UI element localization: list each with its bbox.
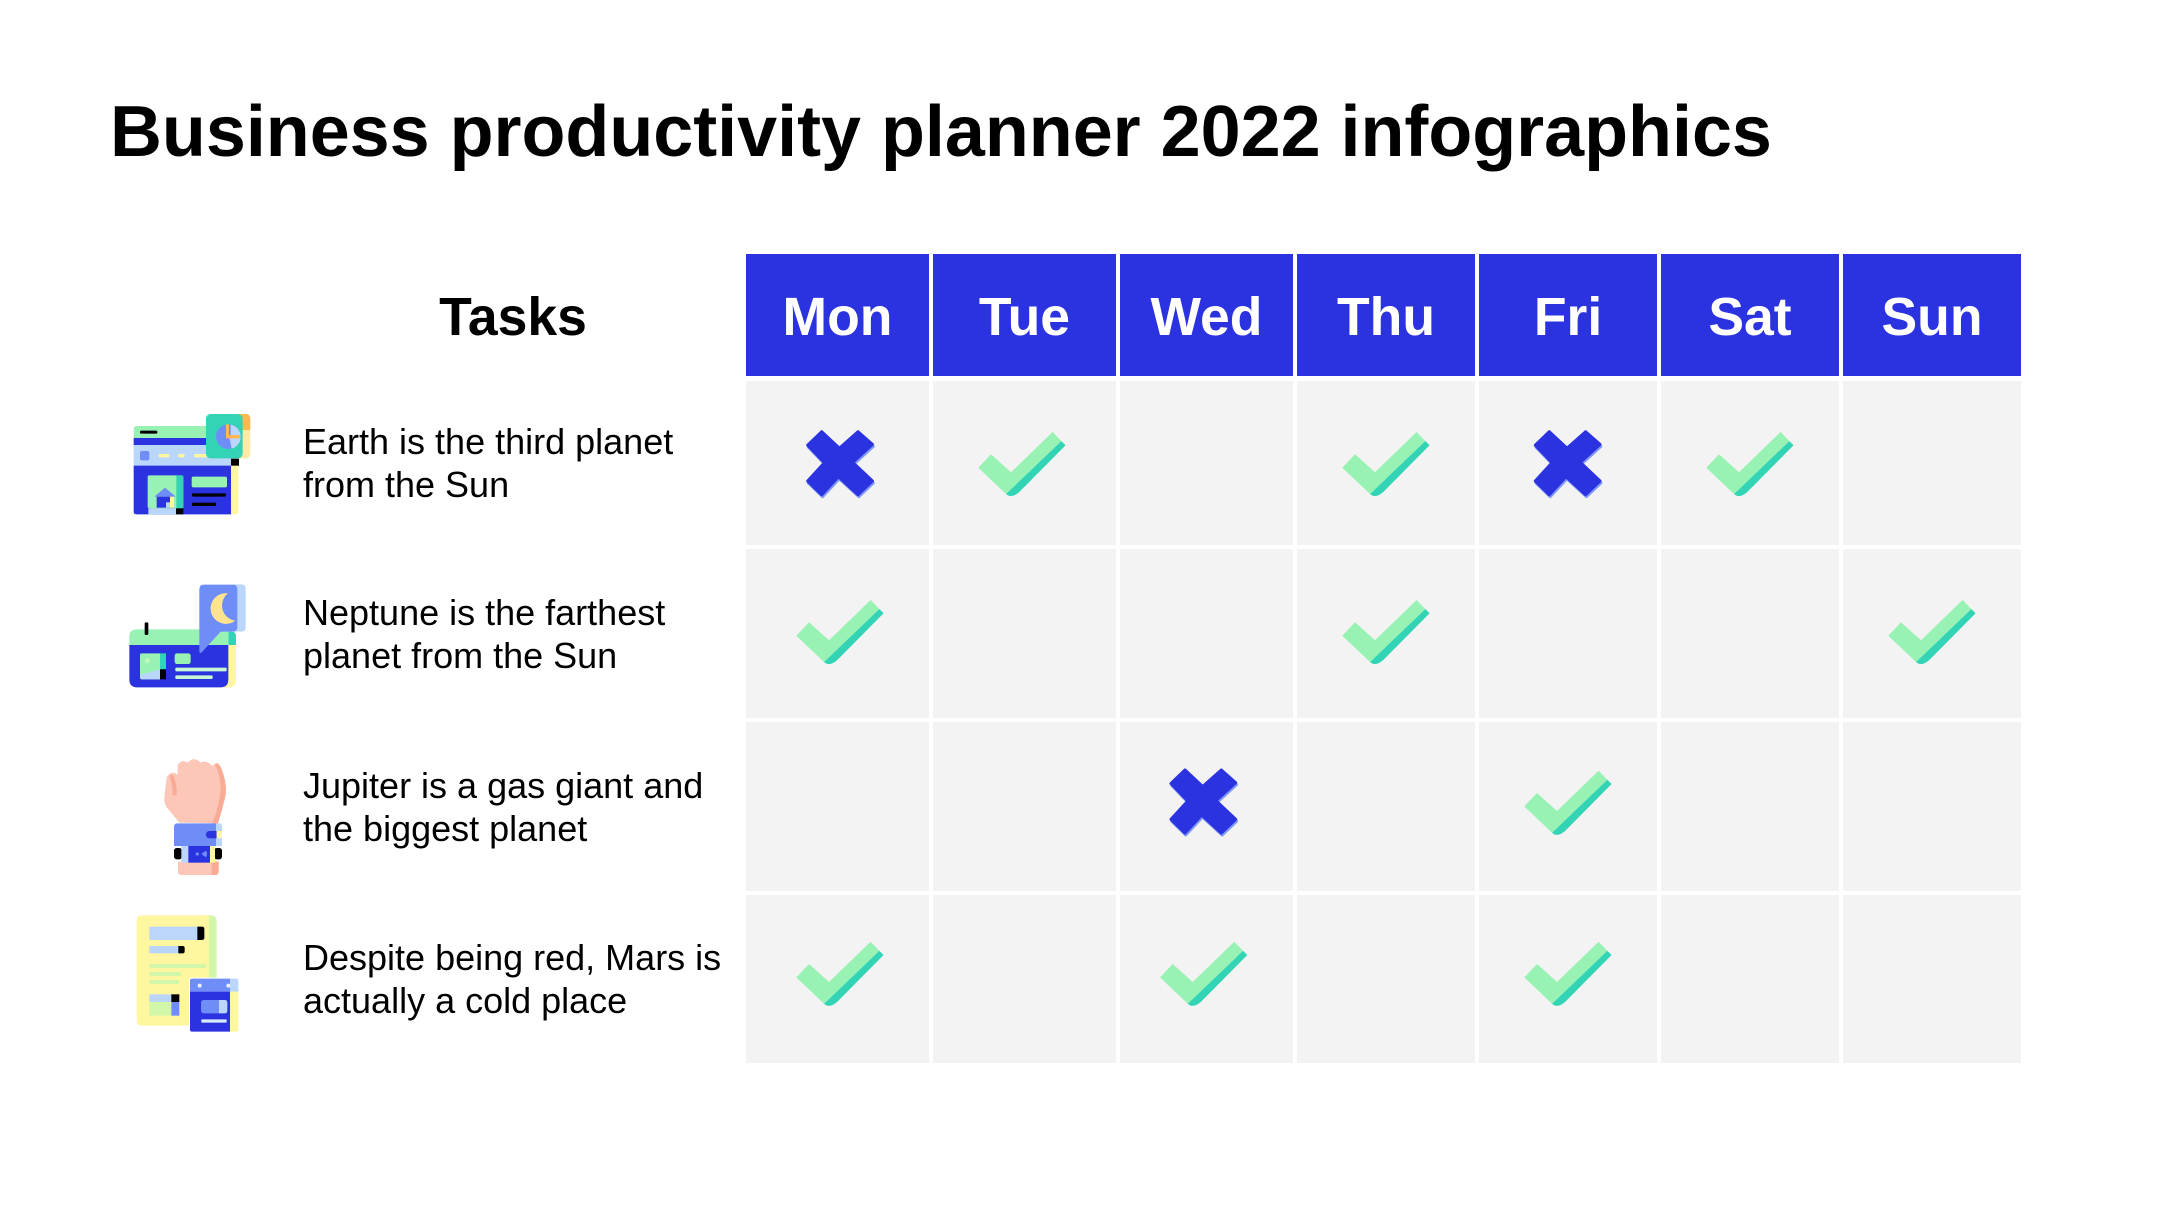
table header: days of the week	[746, 254, 2021, 376]
icon: hand with smart wristband	[164, 759, 226, 875]
header: Thu	[1297, 254, 1475, 376]
header: Sun	[1843, 254, 2021, 376]
table grid: row 3	[746, 722, 2021, 891]
text: task 1: from the Sun	[303, 464, 509, 505]
icon: check, row 4 Wed	[1160, 942, 1247, 1006]
header: Mon	[746, 254, 929, 376]
icon: cross, row 3 Wed	[1171, 770, 1236, 835]
header: Wed: Wed	[1151, 288, 1262, 347]
header: Mon: Mon	[783, 288, 892, 347]
text: task 2: planet from the Sun	[303, 635, 617, 676]
icon: cross, row 1 Mon	[808, 432, 873, 497]
text: task 3: Jupiter is a gas giant and	[303, 765, 703, 806]
icon: document with chart and small window	[137, 915, 239, 1033]
icon: calendar with moon speech bubble	[129, 584, 246, 687]
icon: check, row 1 Sat	[1706, 432, 1794, 496]
text: task 1: Earth is the third planet	[303, 421, 673, 462]
table grid: row 1	[746, 381, 2021, 545]
header: Thu: Thu	[1337, 288, 1435, 347]
icon: check, row 2 Thu	[1342, 600, 1430, 664]
title: Business productivity planner 2022 infographics	[110, 92, 1772, 172]
text: task 4: actually a cold place	[303, 980, 627, 1021]
table grid: row 4	[746, 895, 2021, 1063]
header: Wed	[1120, 254, 1293, 376]
table grid: row 2	[746, 549, 2021, 718]
header: Tue	[933, 254, 1116, 376]
heading: tasks: Tasks	[439, 288, 587, 347]
icon: check, row 2 Sun	[1888, 600, 1976, 664]
icon: check, row 4 Fri	[1524, 942, 1612, 1006]
icon: check, row 1 Tue	[978, 432, 1066, 496]
icon: cross, row 1 Fri	[1535, 432, 1601, 497]
text: task 3: the biggest planet	[303, 808, 587, 849]
icon: check, row 4 Mon	[796, 942, 884, 1006]
icon: check, row 1 Thu	[1342, 432, 1430, 496]
header: Tue: Tue	[979, 288, 1070, 347]
text: task 2: Neptune is the farthest	[303, 592, 665, 633]
text: task 4: Despite being red, Mars is	[303, 937, 721, 978]
icon: browser window with house and pie chart	[134, 414, 250, 514]
header: Sun: Sun	[1881, 288, 1983, 347]
header: Sat: Sat	[1708, 288, 1792, 347]
icon: check, row 2 Mon	[796, 600, 884, 664]
header: Fri: Fri	[1534, 288, 1602, 347]
icon: check, row 3 Fri	[1524, 771, 1612, 835]
header: Sat	[1661, 254, 1839, 376]
header: Fri	[1479, 254, 1657, 376]
